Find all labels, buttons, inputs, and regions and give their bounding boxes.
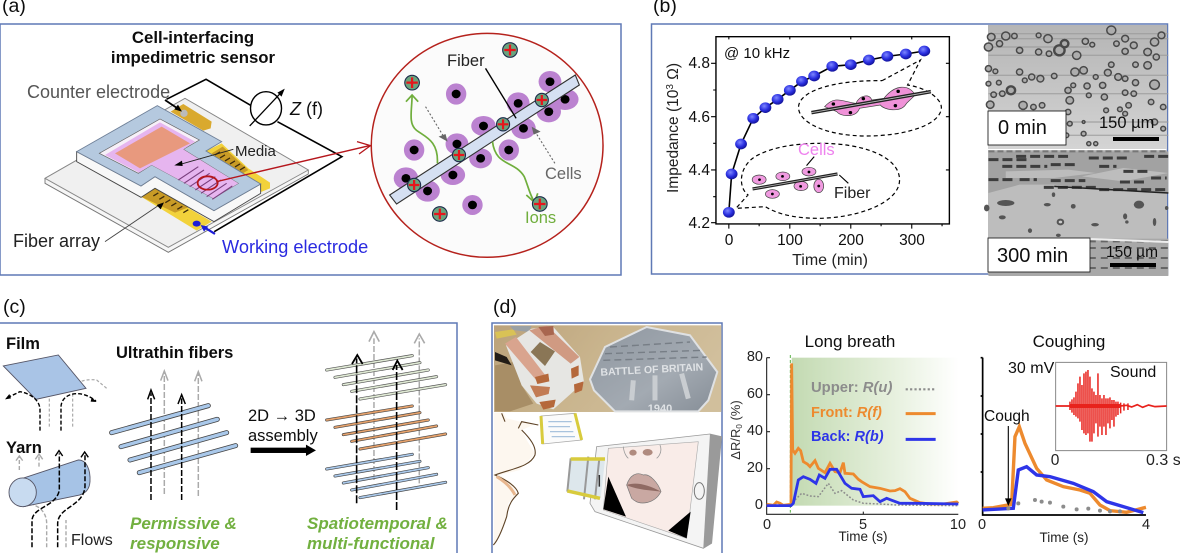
long breath labels: 0 [763,517,771,533]
micrograph: 300 min: 300 min [997,245,1068,267]
panel text: 2D → 3D [248,407,316,425]
impedance chart [665,37,949,269]
chart: long breath [728,332,966,544]
assembly arrow [251,445,316,456]
device labels: impedimetric sensor [111,48,276,67]
device labels: Fiber [447,52,485,70]
panel text: Ultrathin fibers [116,344,233,362]
long breath labels: 0 [755,497,763,513]
coughing labels: Sound [1110,364,1156,381]
panel: wearable breath sensor [492,323,722,553]
panel text: assembly [248,427,318,445]
long breath labels: Front: R(f) [811,405,882,421]
long breath labels [728,332,966,544]
long breath labels: Time (s) [838,529,888,544]
chart labels: 4.8 [688,55,710,72]
photo: sensor cube beside coin: 1940 [648,403,672,415]
micrograph: 300 min: 150 µm [1106,244,1158,261]
illustration: face profile [493,413,538,547]
long breath labels: 40 [747,423,763,439]
coughing labels: 0 [978,517,986,533]
chart: coughing [978,332,1180,545]
coughing labels: 0 [1051,452,1060,469]
zoomed circle: fiber, cells and ions [371,33,603,257]
micrograph: 0 min: 150 µm [1099,114,1154,132]
chart labels: 4.4 [688,162,710,179]
long breath labels: 80 [747,349,763,365]
chart labels: Fiber [834,185,871,202]
device labels: Fiber array [13,231,100,251]
long breath labels: 10 [950,517,966,533]
long breath labels: Back: R(b) [811,429,884,445]
photo: sensor cube beside coin [494,325,721,415]
panel text: Flows [71,532,113,549]
panel text: responsive [130,534,220,553]
chart labels: Ω) [665,63,682,84]
panel: impedance over time and micrographs [652,24,1168,276]
film and yarn [3,355,107,547]
coughing labels: Cough [984,408,1030,425]
panel text: Permissive & [130,514,237,533]
long breath labels: (%) [728,400,743,424]
chart labels: 200 [838,232,864,249]
chart labels: 300 [899,232,925,249]
panel text [6,335,448,553]
chart labels: 4.2 [688,215,710,232]
long breath labels: 60 [747,386,763,402]
micrograph: 0 min: 0 min [998,117,1047,139]
chart labels: Cells [798,141,835,159]
device labels: Working electrode [222,237,368,257]
panel text: Film [6,335,40,353]
chart labels: Impedance (10 [665,90,682,193]
panel: cell-interfacing impedimetric sensor [0,24,621,275]
device labels: Media [235,143,277,160]
device labels: Z (f) [289,99,323,119]
chart labels: 3 [665,84,676,90]
coin inscription: BATTLE OF BRITAIN [600,361,704,379]
illustration: smartphone with mouth [567,434,722,548]
long breath labels: 20 [747,460,763,476]
long breath labels: 0 [735,424,744,429]
label: (c): (c) [3,296,26,318]
coughing labels: 30 mV [1008,360,1055,377]
device labels: Counter electrode [27,82,170,102]
coughing labels [978,332,1180,545]
micrograph: 0 min [984,25,1168,149]
chart labels: 0 [725,232,734,249]
device labels: Ions [525,209,556,227]
3D stacked fibers [327,332,446,510]
long breath labels: 5 [859,517,867,533]
long breath labels: Long breath [805,332,895,351]
chart labels: Time (min) [792,252,868,269]
label: (d): (d) [493,296,517,318]
chart labels: 100 [777,232,803,249]
panel: film, yarn and ultrathin fibers [0,323,457,553]
device labels: Cell-interfacing [132,28,254,47]
coughing labels: 0.3 s [1146,452,1180,469]
chart labels: 4.6 [688,109,710,126]
long breath labels: ΔR/R [728,429,743,460]
long breath labels: Upper: R(u) [811,380,892,396]
device illustration [45,98,308,252]
panel text: Yarn [6,439,42,457]
chart labels [665,45,925,269]
panel text: Spatiotemporal & [307,514,448,533]
device labels: Cells [545,165,582,183]
coughing labels: Time (s) [1040,530,1088,545]
circuit wires and impedance symbol [166,79,370,232]
device labels [13,28,582,257]
coughing labels: 4 [1142,517,1150,533]
ultrathin fibers in 2D [112,371,236,500]
illustration: sensor sheet [541,413,582,444]
chart labels: @ 10 kHz [724,45,790,62]
panel text: multi-functional [307,534,436,553]
coughing labels: Coughing [1033,332,1105,351]
micrograph: 300 min [984,150,1168,276]
